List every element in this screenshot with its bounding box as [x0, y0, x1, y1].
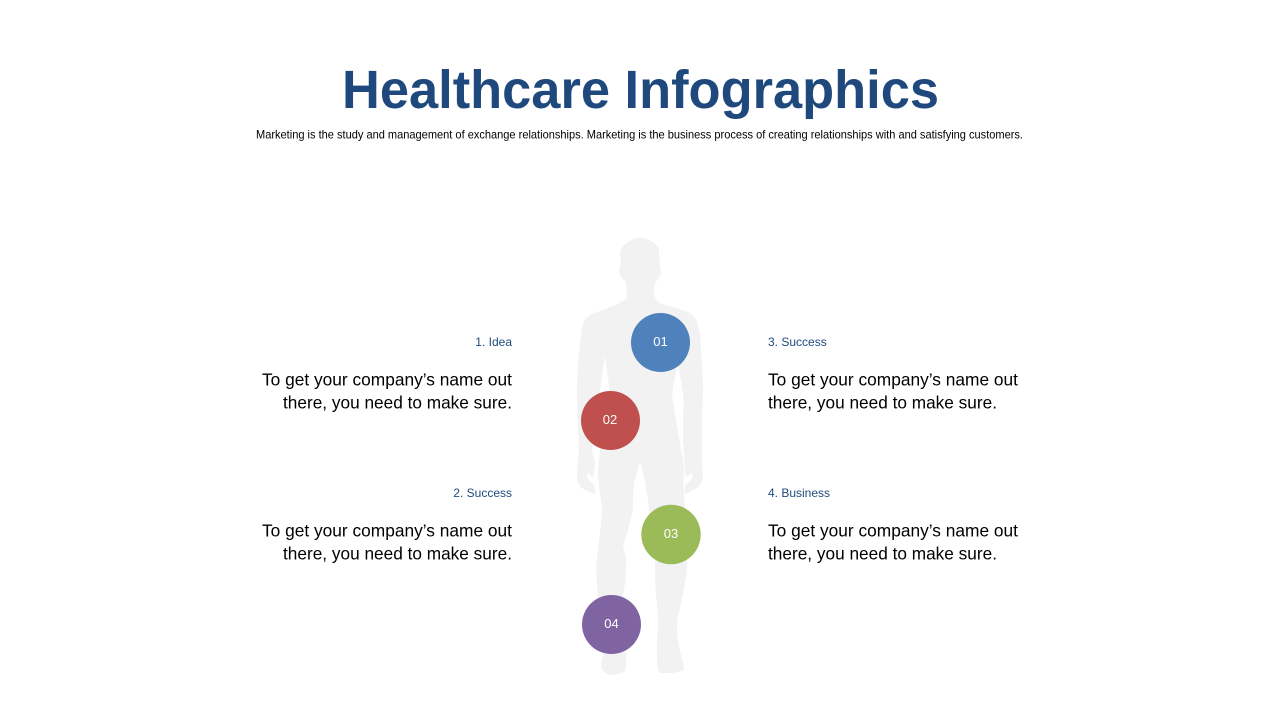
text block: 4. Business: there, you need to make sure. — [768, 544, 997, 564]
text block: 2. Success: 2. Success — [453, 486, 512, 500]
text block: 3. Success — [768, 335, 1018, 412]
marker 01: 01 — [653, 334, 668, 349]
text block: 1. Idea: To get your company’s name out — [262, 370, 512, 390]
text block: 2. Success — [262, 486, 512, 564]
text block: 3. Success: there, you need to make sure. — [768, 392, 997, 412]
marker 01 — [631, 313, 690, 372]
title: Healthcare Infographics — [342, 60, 939, 120]
text block: 4. Business: To get your company’s name out — [768, 520, 1018, 540]
subtitle: Marketing is the study and management of exchange relationships. Marketing is the business process of creating relationships with and satisfying customers. — [256, 128, 1023, 142]
text block: 2. Success: there, you need to make sure. — [283, 544, 512, 564]
marker 03: 03 — [664, 526, 678, 541]
text block: 3. Success: 3. Success — [768, 335, 827, 349]
text block: 2. Success: To get your company’s name out — [262, 520, 512, 540]
text block: 1. Idea — [262, 335, 512, 412]
text block: 4. Business — [768, 486, 1018, 564]
marker 02 — [581, 391, 640, 450]
text block: 1. Idea: 1. Idea — [475, 335, 512, 349]
marker 04 — [582, 595, 641, 654]
marker 03 — [641, 505, 701, 564]
text block: 1. Idea: there, you need to make sure. — [283, 392, 512, 412]
text block: 3. Success: To get your company’s name out — [768, 370, 1018, 390]
marker 04: 04 — [604, 616, 619, 631]
text block: 4. Business: 4. Business — [768, 486, 830, 500]
human body silhouette — [577, 237, 703, 675]
marker 02: 02 — [603, 412, 617, 427]
